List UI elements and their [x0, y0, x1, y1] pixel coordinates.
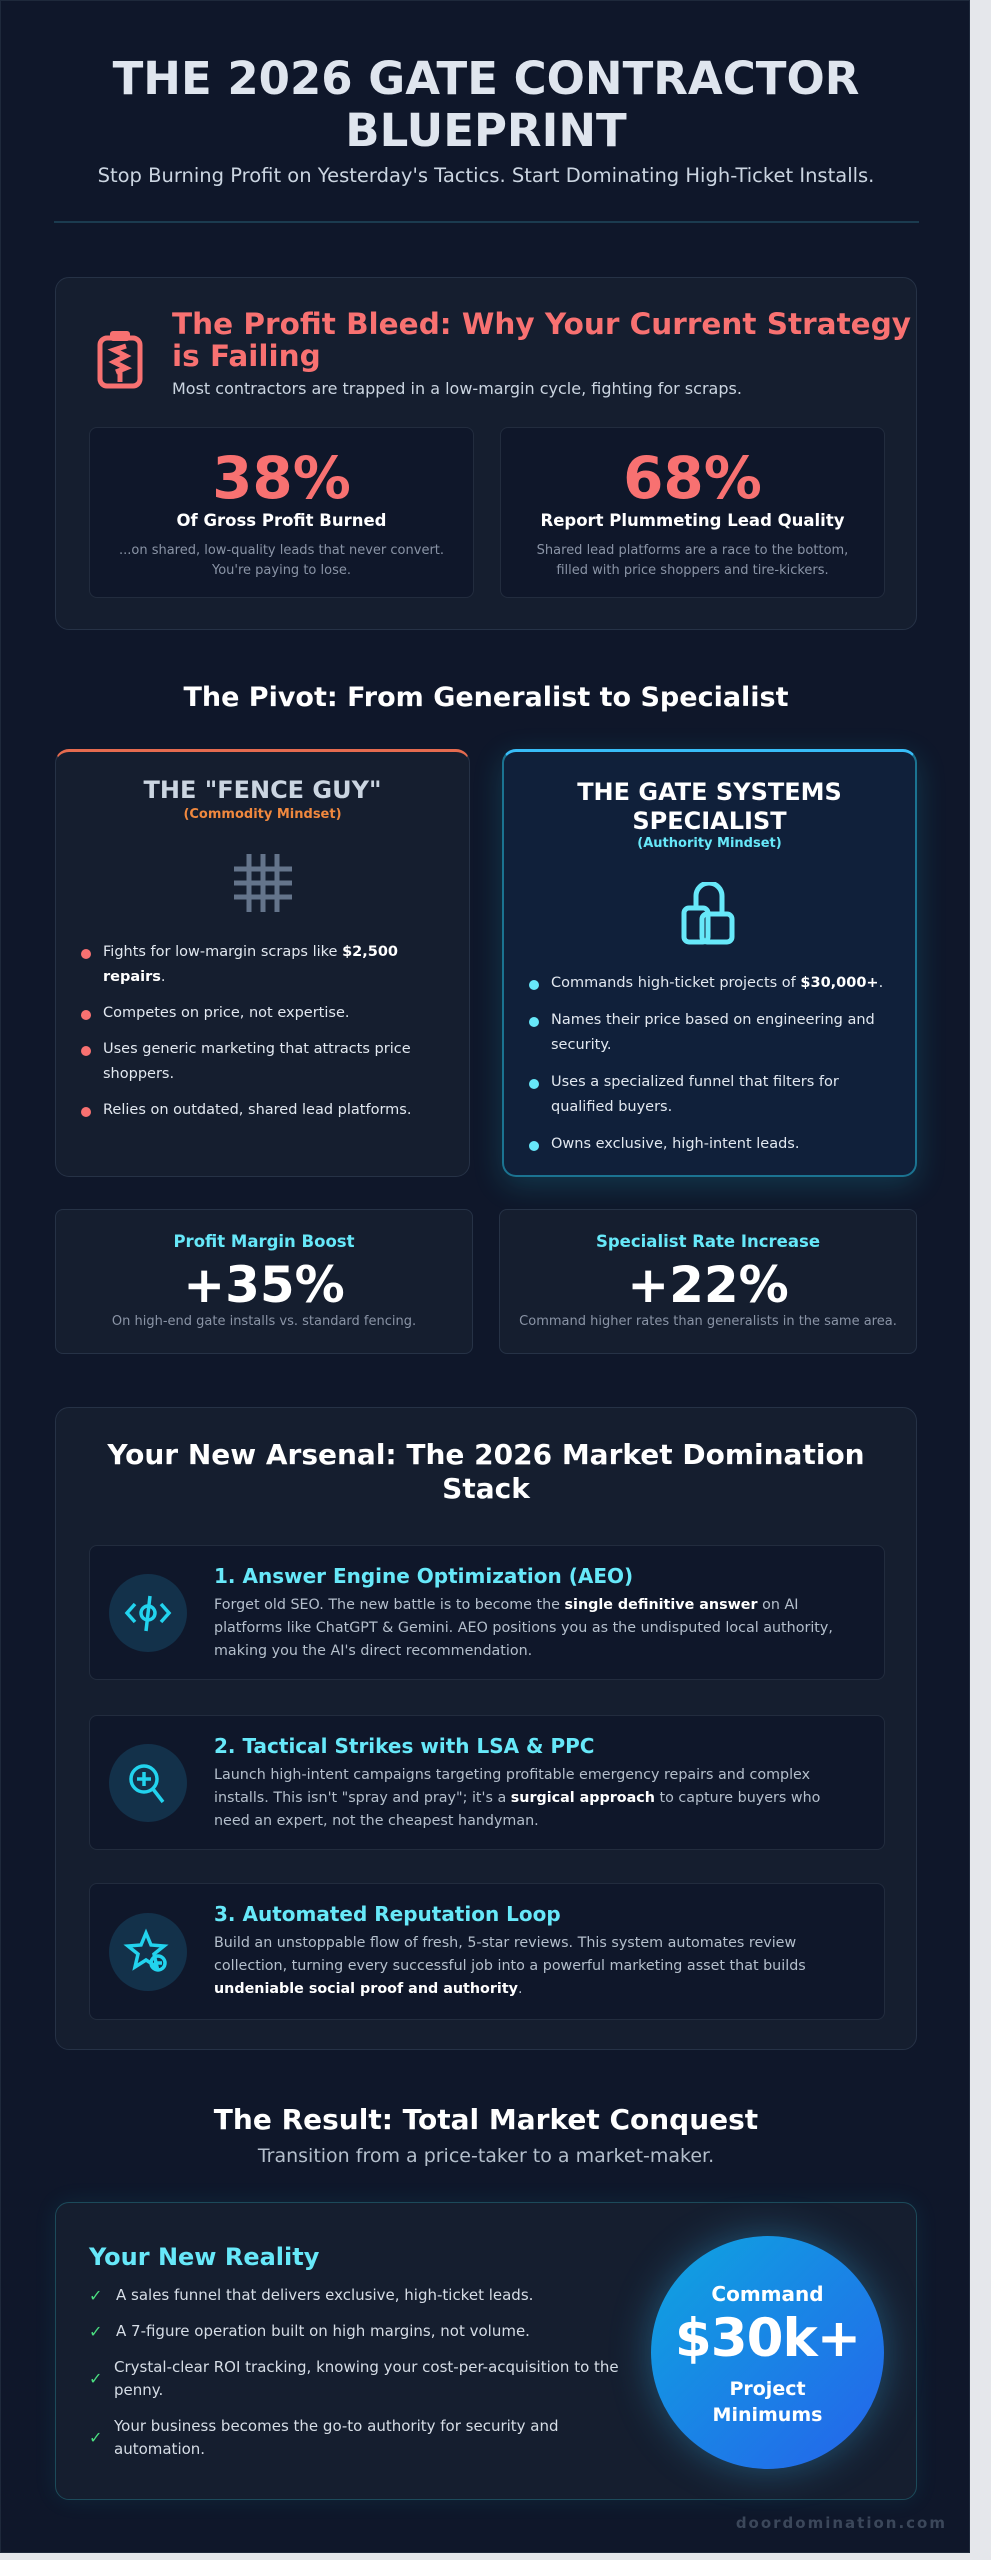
item: reputation: [89, 1883, 885, 2020]
stat: profit margin boost: Profit Margin Boost: [173, 1232, 355, 1251]
stat: profit margin boost: [55, 1209, 473, 1354]
item: reputation: 3. Automated Reputation Loop: [214, 1902, 561, 1926]
list: fence guy: Fights for low-margin scraps like $2,500 repairs.: [103, 944, 398, 985]
callout: 30k circle: Project: [729, 2378, 806, 2400]
item: LSA PPC: [89, 1715, 885, 1850]
item: reputation: Build an unstoppable flow of fresh, 5-star reviews. This system automates review collection, turning every successful job into a powerful marketing asset that builds undeniable social proof and authority.: [214, 1935, 806, 1997]
icon: code: [109, 1574, 187, 1652]
item: AEO: 1. Answer Engine Optimization (AEO): [214, 1564, 633, 1588]
heading: result: The Result: Total Market Conquest: [214, 2103, 758, 2136]
list: specialist: Names their price based on engineering and security.: [551, 1012, 875, 1053]
stat: profit margin boost: On high-end gate installs vs. standard fencing.: [112, 1314, 416, 1329]
item: AEO: [89, 1545, 885, 1680]
checklist: A 7-figure operation built on high margins, not volume.: [116, 2322, 530, 2340]
checklist: [89, 2286, 619, 2458]
callout: 30k circle: Minimums: [713, 2404, 822, 2426]
stat: profit margin boost: +35%: [183, 1256, 345, 1314]
panel: gate systems specialist: THE GATE SYSTEMS: [577, 778, 842, 806]
stat: 38%: ...on shared, low-quality leads that never convert.: [119, 543, 444, 558]
subtitle: Stop Burning Profit on Yesterday's Tactics. Start Dominating High-Ticket Installs.: [98, 164, 874, 187]
stat: 68%: Report Plummeting Lead Quality: [540, 511, 844, 530]
stat: specialist rate increase: Command higher rates than generalists in the same area.: [519, 1314, 897, 1329]
callout: 30k circle: [651, 2236, 884, 2469]
checklist: Your business becomes the go-to authority for security and automation.: [114, 2417, 559, 2458]
stat: specialist rate increase: [499, 1209, 917, 1354]
checklist: ✓: [89, 2322, 102, 2341]
panel: gate systems specialist: [502, 749, 917, 1177]
heading: pivot: The Pivot: From Generalist to Specialist: [183, 682, 789, 713]
list: specialist: Owns exclusive, high-intent leads.: [551, 1136, 799, 1152]
stat: 68%: 68%: [623, 444, 762, 512]
icon: zoom: [109, 1744, 187, 1822]
stat: 38%: 38%: [212, 444, 351, 512]
panel: new reality: [55, 2202, 917, 2500]
panel: arsenal: [55, 1407, 917, 2050]
list: fence guy: Competes on price, not expertise.: [103, 1005, 349, 1021]
icon: lock: [682, 882, 734, 944]
heading: [107, 1438, 865, 1505]
stat: specialist rate increase: Specialist Rate Increase: [596, 1232, 820, 1251]
panel: gate systems specialist: (Authority Mindset): [637, 836, 782, 851]
icon: star: [109, 1913, 187, 1991]
stat: specialist rate increase: +22%: [627, 1256, 789, 1314]
list: fence guy: Relies on outdated, shared lead platforms.: [103, 1102, 411, 1118]
stat: 38%: [89, 427, 474, 598]
item: AEO: Forget old SEO. The new battle is to become the single definitive answer on AI platforms like ChatGPT & Gemini. AEO positions you as the undisputed local authority, making you the AI's direct recommendation.: [214, 1597, 833, 1659]
heading: Stack: [442, 1472, 530, 1505]
heading: Your New Arsenal: The 2026 Market Domination: [107, 1438, 865, 1471]
panel: fence guy: (Commodity Mindset): [183, 807, 342, 822]
subheading: Transition from a price-taker to a market-maker.: [258, 2145, 714, 2167]
icon: clipboard: [98, 331, 142, 388]
text: Most contractors are trapped in a low-margin cycle, fighting for scraps.: [172, 379, 742, 398]
stat: 68%: Shared lead platforms are a race to the bottom,: [537, 543, 848, 558]
stat: 68%: filled with price shoppers and tire-kickers.: [556, 563, 829, 578]
list: fence guy: [81, 944, 411, 1118]
checklist: ✓: [89, 2286, 102, 2305]
list: specialist: Commands high-ticket projects of $30,000+.: [551, 975, 883, 991]
checklist: ✓: [89, 2369, 102, 2388]
stat: 38%: You're paying to lose.: [212, 563, 351, 578]
list: specialist: [529, 975, 883, 1152]
list: specialist: Uses a specialized funnel that filters for qualified buyers.: [551, 1074, 839, 1115]
item: LSA PPC: Launch high-intent campaigns targeting profitable emergency repairs and complex installs. This isn't "spray and pray"; it's a surgical approach to capture buyers who need an expert, not the cheapest handyman.: [214, 1767, 820, 1829]
checklist: ✓: [89, 2428, 102, 2447]
callout: 30k circle: Command: [711, 2282, 824, 2306]
panel: fence guy: [55, 749, 470, 1177]
panel: new reality: Your New Reality: [89, 2243, 319, 2271]
list: fence guy: Uses generic marketing that attracts price shoppers.: [103, 1041, 411, 1082]
checklist: A sales funnel that delivers exclusive, high-ticket leads.: [116, 2286, 533, 2304]
callout: 30k circle: $30k+: [675, 2308, 860, 2369]
item: LSA PPC: 2. Tactical Strikes with LSA & PPC: [214, 1734, 594, 1758]
title: BLUEPRINT: [345, 104, 627, 157]
title: [112, 52, 859, 157]
icon: fence grid: [234, 854, 292, 912]
panel: fence guy: THE "FENCE GUY": [143, 776, 382, 804]
footer: doordomination.com: [736, 2514, 947, 2532]
panel: profit bleed: [55, 277, 917, 630]
heading: The Profit Bleed: Why Your Current Strategy is Failing: [172, 307, 911, 373]
stat: 68%: [500, 427, 885, 598]
title: THE 2026 GATE CONTRACTOR: [113, 52, 859, 105]
stat: 38%: Of Gross Profit Burned: [176, 511, 386, 530]
checklist: Crystal-clear ROI tracking, knowing your cost-per-acquisition to the penny.: [114, 2358, 619, 2399]
panel: gate systems specialist: SPECIALIST: [632, 807, 787, 835]
